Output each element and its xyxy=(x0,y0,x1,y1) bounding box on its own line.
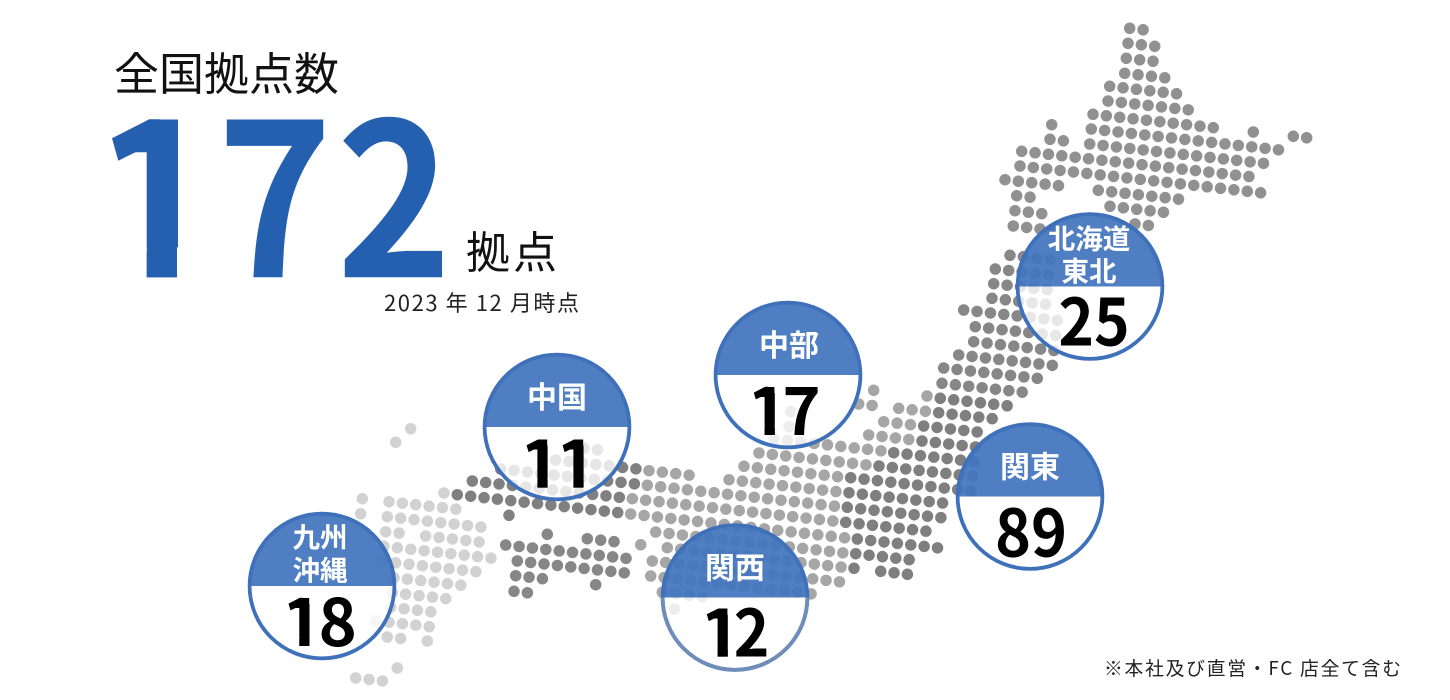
badge: Kyushu and Okinawa: 沖縄 xyxy=(292,548,348,588)
badge: Hokkaido and Tohoku: 25 xyxy=(1058,271,1130,365)
map region: Chubu and Kansai xyxy=(631,390,927,609)
badge: Chugoku: 中国 xyxy=(527,373,587,417)
badge: Kanto: 関東 xyxy=(1000,442,1060,486)
map region: Hokkaido xyxy=(1005,28,1307,230)
badge: Kansai: 関西 xyxy=(705,544,765,588)
badge: Chubu: 中部 xyxy=(759,321,819,365)
badge: Hokkaido and Tohoku: 北海道 xyxy=(1048,216,1130,256)
total number: 7 xyxy=(217,31,333,339)
badge: Chugoku: 1 xyxy=(560,413,595,507)
badge: Kyushu and Okinawa: 8 xyxy=(318,571,357,665)
badge: Chubu xyxy=(716,303,860,455)
dot map of Japan xyxy=(356,28,1307,681)
badge: Kanto: 89 xyxy=(995,482,1067,576)
badge: Hokkaido and Tohoku: 東北 xyxy=(1062,249,1116,289)
map region: Tohoku xyxy=(942,255,1058,392)
total number xyxy=(112,116,442,278)
footnote: ※本社及び直営・FC 店全て含む xyxy=(1104,654,1401,681)
badge: Kansai: 2 xyxy=(734,582,769,676)
map region: Chugoku xyxy=(457,448,636,515)
badge: Kyushu and Okinawa: 1 xyxy=(286,571,321,666)
badge: Chugoku: 1 xyxy=(524,413,559,507)
map region: Kyushu and Okinawa xyxy=(356,429,491,681)
badge: Chugoku xyxy=(485,355,629,507)
total number: 1 xyxy=(102,31,218,339)
badge: Kansai: 1 xyxy=(704,582,740,676)
unit label: 拠点 xyxy=(466,217,560,281)
map region: Kanto xyxy=(846,398,1008,574)
map region: Shikoku xyxy=(506,534,626,593)
badge: Kansai xyxy=(663,525,807,676)
badge: Chubu: 7 xyxy=(782,360,821,454)
badge: Chubu: 1 xyxy=(751,360,787,455)
date note: 2023 年 12 月時点 xyxy=(384,286,579,318)
total number: 2 xyxy=(336,31,452,339)
badge: Kyushu and Okinawa: 九州 xyxy=(292,515,348,555)
badge: Kanto xyxy=(958,424,1102,576)
badge: Kyushu and Okinawa xyxy=(250,514,394,666)
badge: Hokkaido and Tohoku xyxy=(1018,214,1162,365)
title: 全国拠点数 xyxy=(114,38,339,103)
